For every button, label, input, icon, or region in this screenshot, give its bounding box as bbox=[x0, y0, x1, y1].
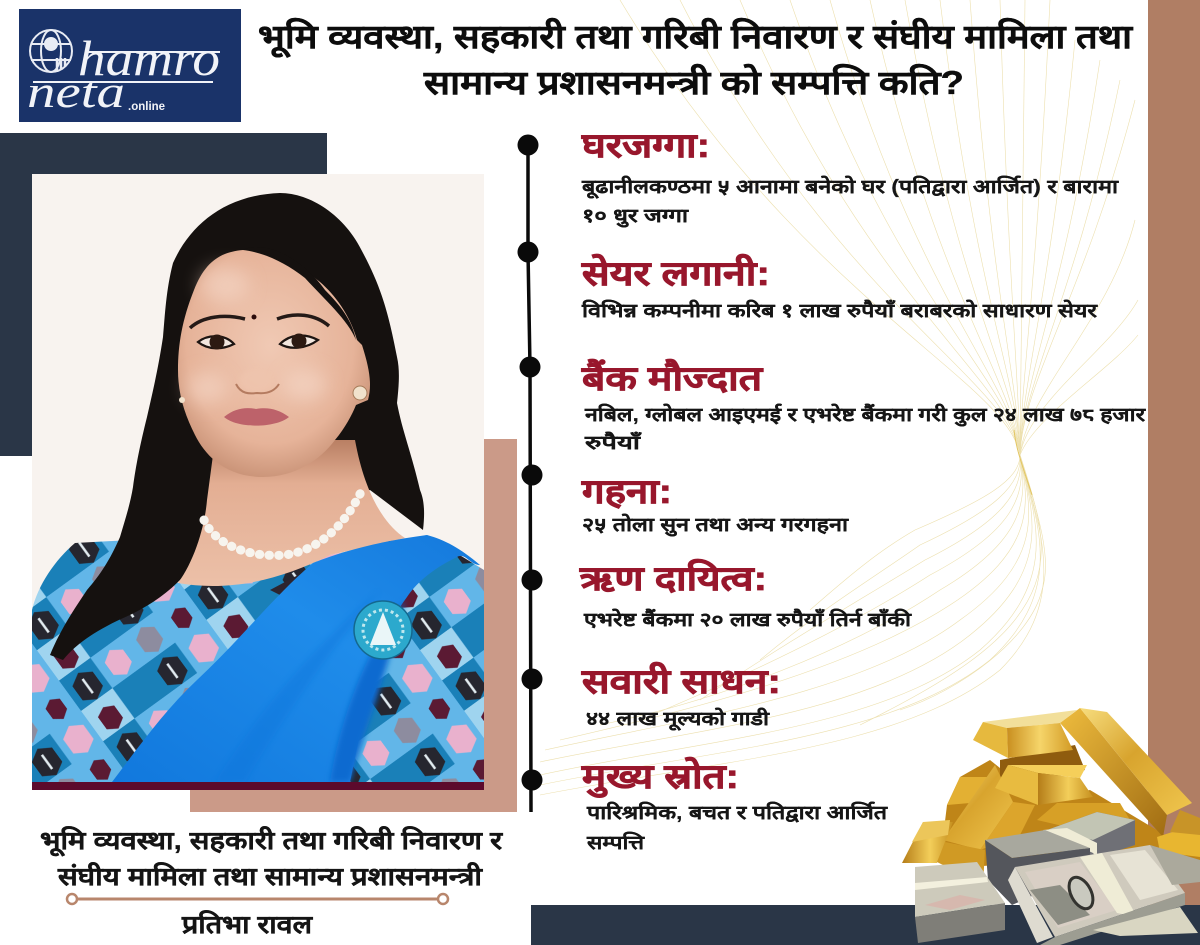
title: सामान्य प्रशासनमन्त्री को सम्पत्ति कति? bbox=[423, 63, 964, 101]
eyebrows bbox=[190, 316, 245, 328]
hair bbox=[50, 193, 424, 660]
item: share investment bbox=[581, 253, 1098, 322]
item: house and land: बूढानीलकण्ठमा ५ आनामा बनेको घर (पतिद्वारा आर्जित) र बारामा bbox=[581, 175, 1119, 199]
item: loan liability: एभरेष्ट बैंकमा २० लाख रुपैयाँ तिर्न बाँकी bbox=[583, 608, 912, 631]
face bbox=[178, 250, 370, 477]
item: vehicle: सवारी साधन: bbox=[581, 661, 781, 701]
decorative gold line waves bbox=[540, 0, 1138, 795]
gold bars bbox=[902, 708, 1200, 885]
illustration: gold bars and cash bbox=[902, 708, 1200, 945]
item: main source: सम्पत्ति bbox=[586, 831, 645, 854]
badge bbox=[354, 601, 412, 659]
cash bundles bbox=[915, 812, 1200, 945]
caption: portfolio and name bbox=[40, 826, 504, 939]
item: bank balance: बैंक मौज्दात bbox=[581, 358, 764, 398]
item: main source bbox=[581, 756, 888, 854]
bindi bbox=[252, 314, 256, 320]
item: bank balance bbox=[581, 358, 1146, 454]
title: भूमि व्यवस्था, सहकारी तथा गरिबी निवारण र संघीय मामिला तथा bbox=[258, 17, 1134, 58]
navy photo backing block bbox=[0, 133, 327, 456]
item: bank balance: रुपैयाँ bbox=[584, 431, 643, 454]
item: house and land bbox=[581, 127, 1119, 228]
item: bank balance: नबिल, ग्लोबल आइएमई र एभरेष्ट बैंकमा गरी कुल २४ लाख ७८ हजार bbox=[584, 403, 1146, 427]
dark neckline band bbox=[270, 540, 392, 595]
logo: hamro neta bbox=[19, 9, 241, 122]
caption divider bbox=[67, 894, 448, 904]
logo: hamro neta: neta bbox=[27, 66, 125, 117]
ear and earring bbox=[353, 386, 367, 400]
gold wave waist bbox=[1014, 430, 1032, 495]
nose bbox=[239, 369, 273, 393]
hairline shading bbox=[243, 247, 356, 340]
item: jewellery: २५ तोला सुन तथा अन्य गरगहना bbox=[582, 513, 849, 537]
saree bbox=[112, 535, 480, 782]
right side accent strip bbox=[1148, 0, 1200, 906]
item: main source: पारिश्रमिक, बचत र पतिद्वारा आर्जित bbox=[586, 801, 888, 824]
item: vehicle bbox=[581, 661, 781, 731]
logo: hamro neta: hamro bbox=[78, 30, 220, 86]
caption: portfolio and name: भूमि व्यवस्था, सहकारी तथा गरिबी निवारण र bbox=[40, 826, 504, 857]
rose photo backing block bbox=[190, 439, 517, 812]
item: main source: मुख्य स्रोत: bbox=[581, 756, 739, 798]
item: house and land: १० धुर जग्गा bbox=[582, 206, 689, 228]
caption: portfolio and name: प्रतिभा रावल bbox=[181, 910, 313, 939]
necklace bbox=[204, 490, 362, 555]
item: share investment: सेयर लगानी: bbox=[581, 253, 770, 293]
item: share investment: विभिन्न कम्पनीमा करिब १ लाख रुपैयाँ बराबरको साधारण सेयर bbox=[581, 299, 1098, 322]
title bbox=[258, 17, 1134, 101]
logo: hamro neta: .online bbox=[128, 101, 165, 113]
neck bbox=[178, 440, 405, 586]
eyes bbox=[198, 336, 234, 348]
timeline bbox=[518, 134, 542, 812]
face highlights bbox=[187, 267, 327, 404]
item: loan liability bbox=[579, 558, 912, 631]
blouse bbox=[32, 535, 484, 782]
bottom navy band bbox=[531, 905, 1200, 945]
caption: portfolio and name: संघीय मामिला तथा सामान्य प्रशासनमन्त्री bbox=[57, 862, 484, 891]
portrait photo bbox=[32, 174, 484, 782]
photo bottom bar bbox=[32, 782, 484, 790]
item: loan liability: ऋण दायित्व: bbox=[579, 558, 767, 598]
item: house and land: घरजग्गा: bbox=[581, 127, 710, 165]
icon: globe bbox=[30, 30, 72, 72]
item: jewellery: गहना: bbox=[581, 473, 672, 511]
item: jewellery bbox=[581, 473, 849, 537]
item: vehicle: ४४ लाख मूल्यको गाडी bbox=[586, 707, 770, 731]
lips bbox=[224, 408, 289, 426]
